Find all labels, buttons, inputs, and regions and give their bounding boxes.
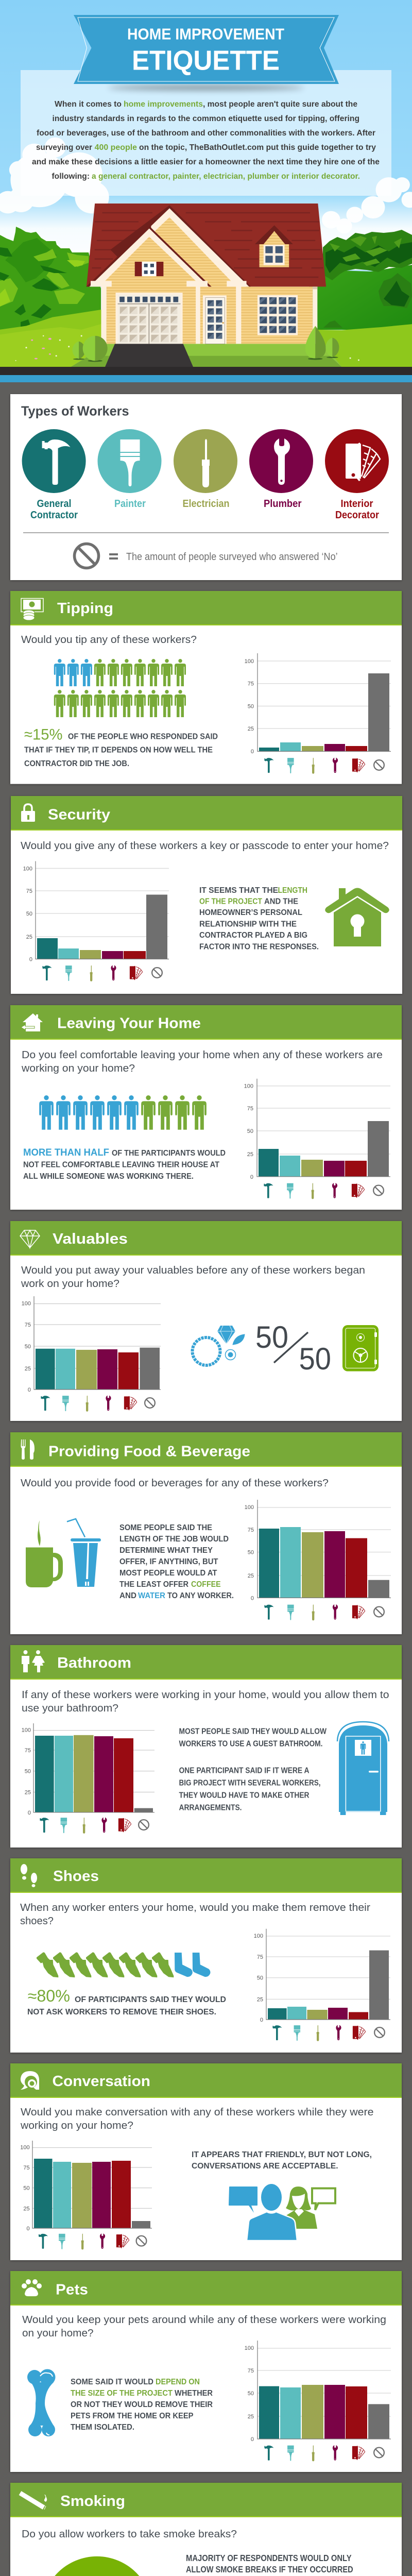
bar chart: food and beverage: 100 [245, 1504, 254, 1511]
question: Would you tip any of these workers? [21, 634, 197, 646]
icon: fork and knife [21, 1439, 35, 1460]
callout: coffee and water: MOST PEOPLE WOULD AT [119, 1569, 217, 1578]
callout: length of project: LENGTH [278, 886, 307, 895]
question [20, 1902, 370, 1927]
panel: food and beverage [10, 1432, 402, 1634]
callout: guest bathroom: WORKERS TO USE A GUEST BATHROOM. [179, 1740, 322, 1749]
heading: valuables: Valuables [53, 1231, 128, 1247]
callout: more than half: OF THE PARTICIPANTS WOULD [112, 1149, 226, 1158]
bar chart: conversation: 100 [20, 2144, 30, 2150]
section header: valuables [10, 1221, 402, 1256]
callout: length of project: AND THE [264, 897, 298, 906]
label: painter: Painter [114, 498, 146, 510]
section header: pets [10, 2271, 402, 2306]
icon: jewelry [193, 1326, 245, 1365]
callout: coffee and water: OFFER, IF ANYTHING, BUT [119, 1557, 218, 1566]
icon: electrician [174, 429, 237, 493]
intro text: and make these decisions a little easier for a homeowner the next time they hire one of the [32, 158, 380, 166]
icon: money [21, 599, 43, 620]
callout: length of project [199, 886, 319, 952]
section header: leaving your home [10, 1005, 402, 1040]
legend: no answer: The amount of people surveyed who answered ‘No’ [126, 551, 338, 563]
panel: shoes [10, 1858, 402, 2053]
section header: tipping [10, 591, 402, 625]
stat: fifty fifty: 50 [299, 1342, 331, 1376]
callout: 15 percent [24, 726, 218, 768]
panel: conversation [10, 2063, 402, 2260]
bar chart: conversation: 25 [23, 2206, 30, 2212]
section header: conversation [10, 2063, 402, 2098]
bar chart: bathroom: 50 [25, 1769, 31, 1775]
callout: guest bathroom: ARRANGEMENTS. [179, 1804, 242, 1812]
bar chart: tipping [245, 653, 391, 774]
bar chart: valuables [22, 1296, 161, 1412]
question [22, 1689, 389, 1714]
icon: plumber [249, 429, 313, 493]
callout: more than half: ALL WHILE SOMEONE WAS WORKING THERE. [23, 1172, 194, 1181]
bar chart: security [23, 861, 169, 981]
icon: paw print [22, 2279, 42, 2296]
question: Would you provide food or beverages for any of these workers? [21, 1478, 329, 1489]
bar chart: food and beverage: 50 [248, 1550, 254, 1556]
panel: types of workers [10, 394, 402, 580]
bar chart: shoes: 0 [260, 2017, 263, 2023]
callout: coffee and water: LENGTH OF THE JOB WOULD [119, 1535, 229, 1544]
callout: coffee and water: WATER [138, 1591, 165, 1600]
illustration: two people talking [229, 2184, 335, 2241]
bar chart: security: 25 [26, 934, 32, 940]
callout: size of the project: DEPEND ON [156, 2378, 200, 2386]
icon: general contractor [22, 429, 86, 493]
callout: size of the project [71, 2378, 213, 2432]
bar chart: bathroom: 25 [25, 1790, 31, 1796]
bar chart: shoes: 75 [257, 1954, 263, 1960]
legend: no answer [74, 544, 338, 568]
callout: 80 percent: OF PARTICIPANTS SAID THEY WOULD [75, 1995, 226, 2004]
label: general contractor [30, 498, 78, 521]
section header: bathroom [10, 1645, 402, 1680]
question [21, 1265, 365, 1290]
bar chart: conversation [20, 2141, 152, 2249]
title ribbon [74, 15, 339, 90]
question: When any worker enters your home, would you make them remove their [20, 1902, 370, 1913]
panel: smoking [10, 2483, 402, 2576]
panel: bathroom [10, 1645, 402, 1848]
bar chart: tipping: 75 [248, 681, 254, 687]
callout: outside of the home [186, 2553, 353, 2576]
label: interior decorator: Interior [341, 498, 373, 510]
callout: coffee and water: COFFEE [191, 1580, 221, 1589]
bar chart: valuables: 25 [25, 1366, 31, 1372]
question: Do you feel comfortable leaving your home when any of these workers are [22, 1049, 383, 1061]
illustration: house [73, 204, 339, 367]
label: plumber: Plumber [264, 498, 302, 510]
callout: coffee and water: SOME PEOPLE SAID THE [119, 1523, 212, 1532]
panel: pets [10, 2271, 402, 2472]
bar chart: security: 0 [29, 956, 32, 962]
callout: friendly conversations: IT APPEARS THAT FRIENDLY, BUT NOT LONG, [192, 2150, 372, 2159]
stat: fifty fifty: 50 [255, 1320, 288, 1354]
bar chart: shoes [254, 1929, 390, 2041]
bar chart: tipping: 25 [248, 726, 254, 732]
icon: bone [27, 2369, 56, 2436]
bar chart: shoes: 100 [254, 1933, 263, 1939]
callout: 15 percent: ≈15% [24, 726, 63, 743]
bar chart: tipping: 50 [248, 704, 254, 710]
bar chart: pets: 100 [245, 2345, 254, 2351]
icon: house with keyhole [325, 888, 389, 946]
intro text [32, 100, 380, 181]
callout: guest bathroom: BIG PROJECT WITH SEVERAL WORKERS, [179, 1779, 320, 1788]
question: shoes? [20, 1916, 54, 1927]
callout: length of project: CONTRACTOR PLAYED A BIG [199, 931, 307, 940]
callout: 15 percent: THAT IF THEY TIP, IT DEPENDS ON HOW WELL THE [24, 746, 213, 755]
panel: security [11, 796, 402, 994]
bar chart: pets: 0 [251, 2436, 254, 2443]
bar chart: food and beverage: 0 [251, 1595, 254, 1601]
section header: security [11, 796, 402, 831]
bar chart: valuables: 75 [25, 1322, 31, 1328]
bar chart: leaving your home: 0 [250, 1174, 253, 1180]
question: Would you make conversation with any of these workers while they were [21, 2107, 374, 2118]
heading: conversation: Conversation [53, 2073, 150, 2090]
callout: outside of the home: MAJORITY OF RESPONDENTS WOULD ONLY [186, 2553, 352, 2563]
icon: padlock [21, 804, 35, 822]
callout: length of project: RELATIONSHIP WITH THE [199, 920, 297, 929]
stat: fifty fifty [255, 1320, 331, 1376]
callout: size of the project: SOME SAID IT WOULD [71, 2378, 153, 2386]
icon: coffee mug [26, 1520, 63, 1587]
label: interior decorator [335, 498, 379, 521]
icon: footprints [21, 1864, 37, 1887]
bar chart: shoes: 25 [257, 1997, 263, 2003]
intro text: on the topic, TheBathOutlet.com put this guide together to try [139, 143, 376, 152]
callout: coffee and water [119, 1523, 234, 1600]
callout: more than half: MORE THAN HALF [23, 1147, 109, 1158]
bar chart: bathroom: 100 [22, 1727, 31, 1734]
bar chart: food and beverage [245, 1500, 391, 1620]
heading: leaving your home: Leaving Your Home [57, 1015, 201, 1031]
question [21, 1049, 383, 1074]
question: use your bathroom? [22, 1703, 118, 1714]
intro text: following: [52, 172, 90, 181]
callout: coffee and water: TO ANY WORKER. [167, 1591, 234, 1600]
intro text: surveying over [36, 143, 92, 152]
heading: pets: Pets [56, 2281, 88, 2298]
callout: 80 percent: ≈80% [28, 1987, 70, 2005]
bar chart: pets: 25 [248, 2414, 254, 2420]
bar chart: pets [245, 2341, 391, 2461]
callout: length of project: OF THE PROJECT [199, 897, 262, 906]
pictogram: shoes and socks [37, 1952, 210, 1977]
bar chart: bathroom: 0 [28, 1810, 31, 1816]
callout: guest bathroom: ONE PARTICIPANT SAID IF IT WERE A [179, 1767, 310, 1775]
bar chart: pets: 75 [248, 2368, 254, 2374]
callout: length of project: IT SEEMS THAT THE [199, 886, 278, 895]
bar chart: security: 100 [23, 866, 32, 872]
panel: tipping [10, 591, 402, 784]
bar chart: bathroom: 75 [25, 1748, 31, 1754]
question: Would you give any of these workers a key or passcode to enter your home? [21, 840, 389, 852]
title line 2: ETIQUETTE [132, 45, 280, 76]
icon: drink cup [67, 1519, 101, 1587]
label: electrician: Electrician [182, 498, 230, 510]
question: on your home? [22, 2328, 94, 2339]
pictogram: people leaving [39, 1095, 207, 1130]
icon: cigarette [20, 2493, 47, 2510]
bar chart: bathroom [22, 1723, 154, 1834]
callout: guest bathroom: MOST PEOPLE SAID THEY WOULD ALLOW [179, 1727, 327, 1736]
heading: types of workers: Types of Workers [21, 403, 129, 418]
callout: 15 percent: CONTRACTOR DID THE JOB. [24, 759, 129, 768]
callout: guest bathroom: THEY WOULD HAVE TO MAKE OTHER [179, 1791, 310, 1800]
callout: length of project: FACTOR INTO THE RESPONSES. [199, 943, 319, 952]
road and stripes [0, 367, 412, 382]
callout: coffee and water: DETERMINE WHAT THEY [119, 1546, 213, 1555]
icon: speech bubbles [21, 2071, 39, 2090]
callout: more than half [23, 1147, 226, 1181]
intro text: food or beverages, use of the bathroom and other commonalities with the workers. After [37, 129, 375, 138]
callout: 80 percent: NOT ASK WORKERS TO REMOVE THEIR SHOES. [27, 2008, 216, 2016]
callout: guest bathroom [179, 1727, 327, 1812]
bar chart: shoes: 50 [257, 1975, 263, 1981]
section header: smoking [10, 2483, 402, 2517]
bar chart: food and beverage: 75 [248, 1527, 254, 1533]
question: working on your home? [20, 2120, 133, 2131]
callout: size of the project: THEM ISOLATED. [71, 2423, 134, 2432]
icon: painter [98, 429, 162, 493]
label: general contractor: General [37, 498, 71, 510]
callout: 80 percent [27, 1987, 226, 2016]
callout: friendly conversations [192, 2150, 372, 2171]
label: general contractor: Contractor [30, 510, 78, 521]
intro text: 400 people [95, 143, 137, 152]
bar chart: tipping: 100 [245, 658, 254, 665]
callout: size of the project: WHETHER [175, 2389, 213, 2398]
header illustration: sky and landscape [0, 0, 412, 369]
bar chart: food and beverage: 25 [248, 1573, 254, 1579]
callout: more than half: NOT FEEL COMFORTABLE LEAVING THEIR HOUSE AT [23, 1160, 219, 1170]
question [20, 2107, 374, 2131]
bar chart: security: 75 [26, 888, 32, 894]
question: Would you put away your valuables before any of these workers began [21, 1265, 365, 1276]
heading: tipping: Tipping [57, 600, 113, 617]
question: work on your home? [21, 1278, 119, 1290]
bar chart: conversation: 75 [23, 2165, 30, 2171]
heading: shoes: Shoes [53, 1868, 99, 1885]
callout: length of project: HOMEOWNER’S PERSONAL [199, 908, 302, 917]
intro text: industry standards in regards to the common etiquette used for tipping, offering [53, 114, 359, 123]
title line 1: HOME IMPROVEMENT [127, 25, 284, 43]
callout: coffee and water: AND [119, 1591, 136, 1600]
callout: 15 percent: OF THE PEOPLE WHO RESPONDED SAID [68, 732, 218, 741]
section header: shoes [10, 1858, 402, 1893]
heading: security: Security [48, 807, 110, 823]
panel: valuables [10, 1221, 402, 1421]
pictogram: people tipping [54, 659, 186, 717]
bar chart: leaving your home: 100 [244, 1083, 253, 1090]
bar chart: valuables: 0 [28, 1387, 31, 1393]
bar chart: pets: 50 [248, 2391, 254, 2397]
bar chart: security: 50 [26, 911, 32, 917]
bar chart: conversation: 0 [26, 2226, 30, 2232]
bar chart: conversation: 50 [23, 2185, 30, 2192]
bar chart: valuables: 100 [22, 1300, 31, 1307]
callout: coffee and water: THE LEAST OFFER [119, 1580, 188, 1589]
intro background panel [21, 70, 391, 196]
callout: size of the project: THE SIZE OF THE PROJECT [71, 2389, 173, 2398]
heading: providing food and beverage: Providing Food & Beverage [48, 1444, 250, 1460]
bar chart: leaving your home: 75 [247, 1106, 253, 1112]
callout: size of the project: OR NOT THEY WOULD REMOVE THEIR [71, 2400, 213, 2409]
question [22, 2314, 386, 2339]
icon: interior decorator [325, 429, 389, 493]
bar chart: leaving your home: 25 [247, 1151, 253, 1158]
heading: bathroom: Bathroom [57, 1655, 131, 1671]
label: interior decorator: Decorator [335, 510, 379, 521]
bar chart: leaving your home: 50 [247, 1128, 253, 1134]
callout: friendly conversations: CONVERSATIONS ARE ACCEPTABLE. [192, 2162, 338, 2171]
icon: man and woman [22, 1650, 45, 1672]
icon: portable toilet [337, 1722, 389, 1815]
heading: smoking: Smoking [60, 2493, 125, 2510]
question: working on your home? [21, 1063, 135, 1074]
intro text: home improvements [124, 100, 203, 109]
intro text: When it comes to [55, 100, 122, 109]
bar chart: tipping: 0 [251, 749, 254, 755]
question: Do you allow workers to take smoke breaks? [22, 2529, 237, 2540]
callout: size of the project: PETS FROM THE HOME OR KEEP [71, 2412, 194, 2420]
bar chart: valuables: 50 [25, 1344, 31, 1350]
icon: house with arrow [21, 1013, 43, 1031]
section header: food and beverage [10, 1432, 402, 1467]
question: If any of these workers were working in your home, would you allow them to [22, 1689, 389, 1701]
question: Would you keep your pets around while any of these workers were working [22, 2314, 386, 2326]
pie chart: smoke breaks [42, 2556, 152, 2576]
icon: diamond [20, 1230, 40, 1248]
bar chart: leaving your home [244, 1079, 390, 1199]
intro text: , most people aren't quite sure about the [203, 100, 357, 109]
icon: safe [342, 1325, 379, 1371]
intro text: a general contractor, painter, electrician, plumber or interior decorator. [92, 172, 360, 181]
callout: outside of the home: ALLOW SMOKE BREAKS IF THEY OCCURRED [186, 2564, 353, 2574]
panel: leaving your home [10, 1005, 402, 1210]
